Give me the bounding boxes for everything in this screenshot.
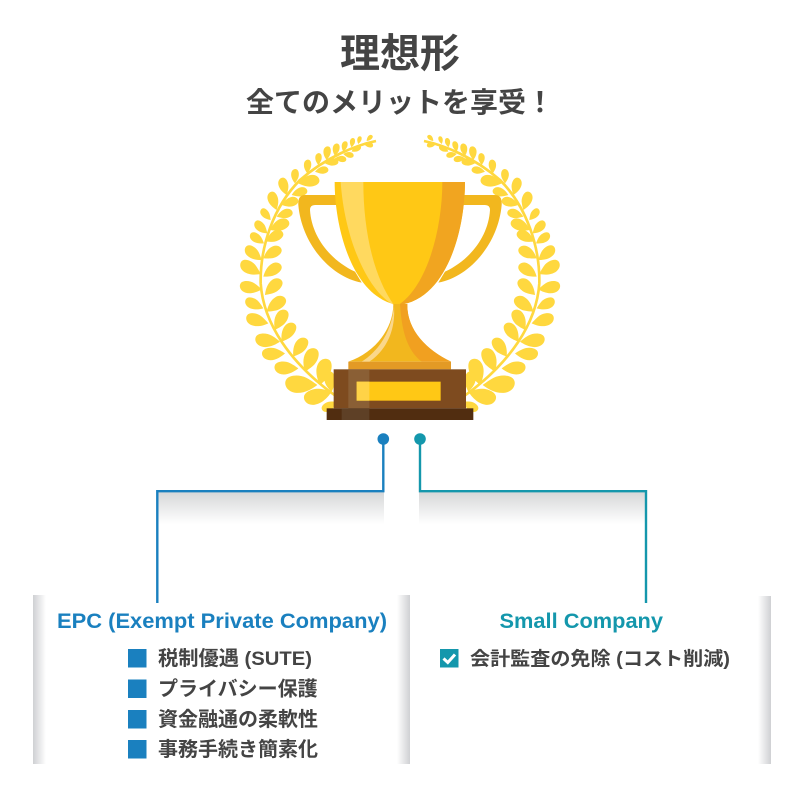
list: EPC merits <box>128 648 318 761</box>
connector: Small Company <box>414 433 646 603</box>
laurel wreath <box>237 134 563 414</box>
connector fade: Small Company <box>419 492 646 524</box>
connector: EPC <box>157 433 389 603</box>
item: tax: 税制優遇 (SUTE) <box>158 648 312 670</box>
subtitle: 全てのメリットを享受！ <box>246 87 554 118</box>
panel: Small Company <box>440 596 771 764</box>
connector fade: EPC <box>158 492 384 524</box>
item: audit exemption: 会計監査の免除 (コスト削減) <box>470 647 730 670</box>
item: privacy: プライバシー保護 <box>158 678 318 700</box>
trophy handles <box>298 195 502 283</box>
icon: trophy with laurel wreath <box>237 134 563 420</box>
trophy cup <box>335 182 465 305</box>
heading: EPC: EPC (Exempt Private Company) <box>57 610 387 633</box>
title: 理想形 <box>340 32 460 76</box>
heading: Small Company: Small Company <box>500 610 663 633</box>
panel: EPC <box>33 595 410 764</box>
trophy stem <box>348 304 451 369</box>
icon: checkbox <box>440 649 458 668</box>
item: simplified procedures: 事務手続き簡素化 <box>158 738 318 761</box>
item: funding: 資金融通の柔軟性 <box>158 708 318 731</box>
trophy plinth <box>327 369 473 420</box>
